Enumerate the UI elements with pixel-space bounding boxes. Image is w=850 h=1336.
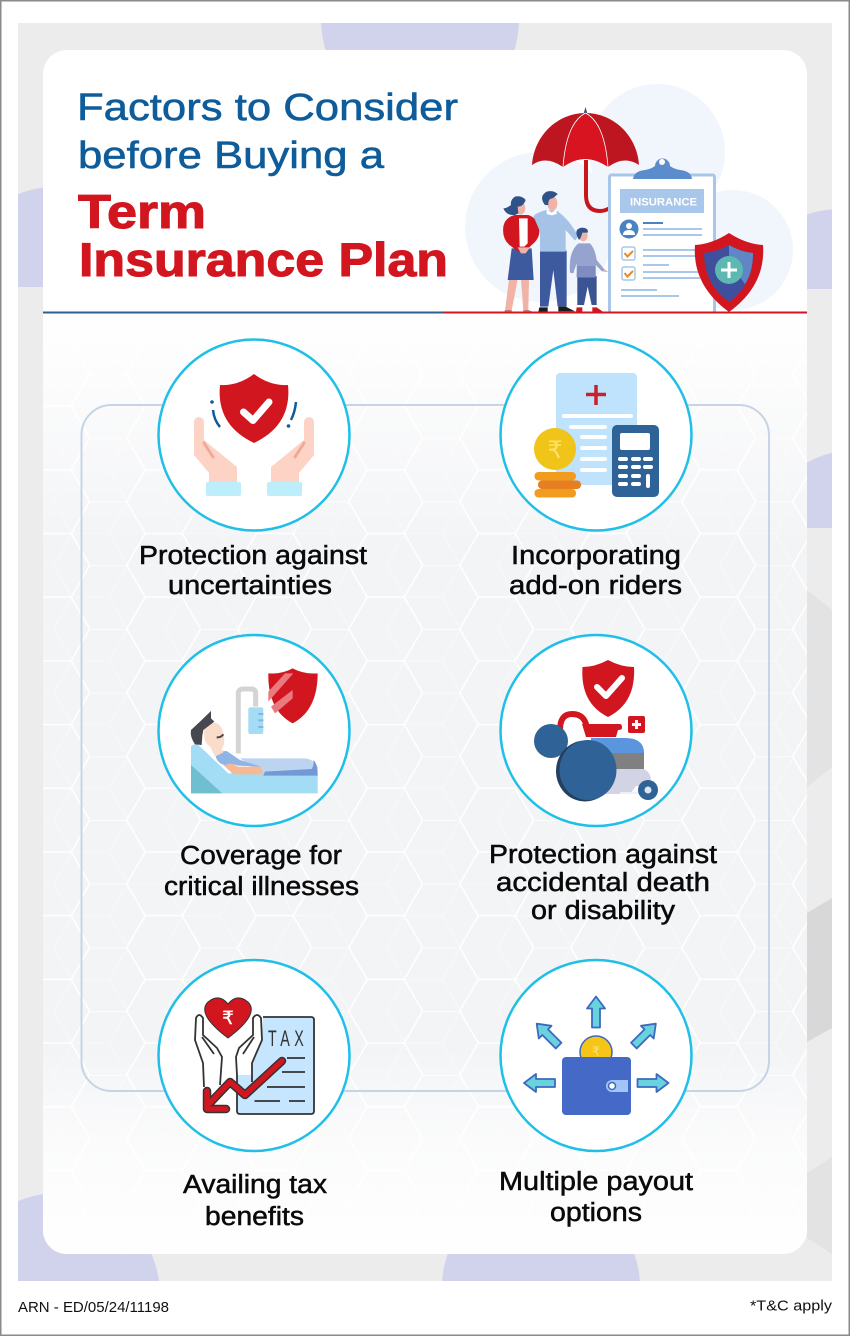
- icon: tax sheet, heart and falling arrow: ₹: [222, 1008, 234, 1029]
- label: Multiple payout: [499, 1168, 693, 1196]
- header divider: [43, 312, 807, 314]
- item: protection against accidental death or disability: [489, 635, 717, 925]
- protection shield: [695, 233, 763, 312]
- label: or disability: [531, 897, 675, 925]
- icon: bill, coins and calculator: [500, 340, 692, 530]
- clipboard: [610, 159, 714, 315]
- item: multiple payout options: [499, 960, 693, 1227]
- title: [77, 87, 458, 286]
- label: [183, 1171, 327, 1231]
- label: Coverage for: [180, 842, 343, 870]
- label: Protection against: [139, 542, 367, 570]
- title: Factors to Consider: [77, 87, 458, 129]
- header illustration: [465, 84, 793, 315]
- icon: tax sheet, heart and falling arrow: [158, 960, 350, 1151]
- icon: bill, coins and calculator: ₹: [547, 436, 563, 464]
- item: incorporating add-on riders: [500, 340, 692, 600]
- icon: wallet with arrows: [500, 960, 692, 1151]
- label: Protection against: [489, 841, 717, 869]
- title: Insurance Plan: [79, 233, 448, 286]
- icon: shield in hands: [158, 340, 350, 530]
- umbrella: [532, 107, 639, 211]
- label: [139, 542, 367, 600]
- footer: ARN code: ARN - ED/05/24/11198: [18, 1299, 169, 1316]
- label: [509, 542, 682, 600]
- label: critical illnesses: [164, 873, 359, 901]
- item: coverage for critical illnesses: [158, 635, 359, 901]
- footer: terms note: *T&C apply: [750, 1298, 833, 1314]
- label: accidental death: [496, 869, 710, 897]
- label: options: [550, 1199, 642, 1227]
- icon: tax sheet, heart and falling arrow: TAX: [268, 1026, 308, 1051]
- title: before Buying a: [78, 135, 385, 177]
- title: Term: [78, 185, 206, 238]
- label: [164, 842, 359, 901]
- family: [503, 191, 608, 312]
- item: protection against uncertainties: [139, 340, 367, 600]
- label: Availing tax: [183, 1171, 327, 1199]
- icon: patient in bed with shield: [158, 635, 350, 826]
- label: benefits: [205, 1203, 304, 1231]
- label: Incorporating: [511, 542, 681, 570]
- icon: wheelchair with shield: [500, 635, 692, 826]
- connector frame: [82, 405, 769, 1091]
- label: [499, 1168, 693, 1227]
- clipboard: INSURANCE: [630, 196, 697, 208]
- item: availing tax benefits: [158, 960, 350, 1231]
- label: add-on riders: [509, 572, 682, 600]
- label: uncertainties: [168, 572, 332, 600]
- label: [489, 841, 717, 925]
- icon: wallet with arrows: ₹: [592, 1045, 600, 1060]
